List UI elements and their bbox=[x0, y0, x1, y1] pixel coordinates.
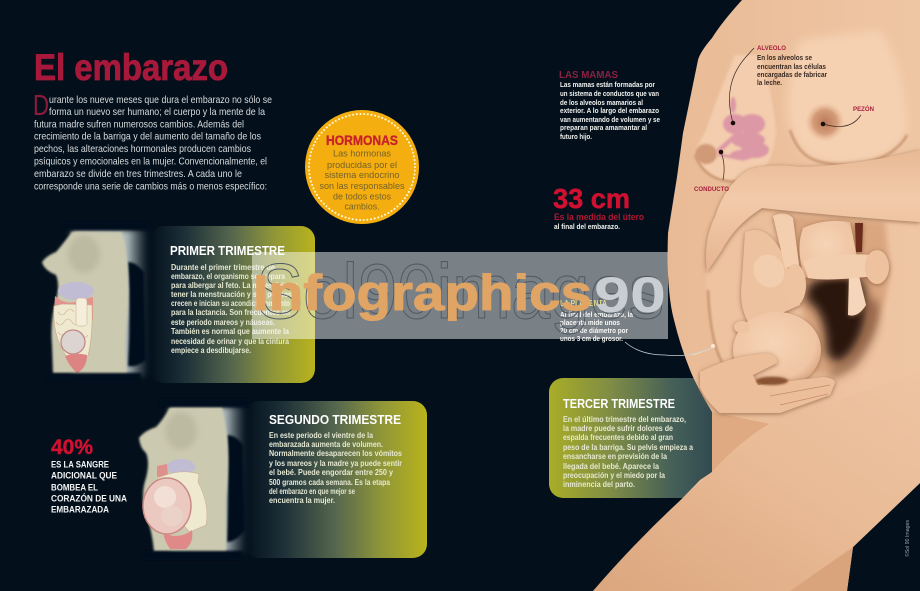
tercer trimestre text: espalda frecuentes debido al gran bbox=[563, 433, 673, 442]
segundo trimestre text bbox=[269, 431, 402, 505]
text: copyright: ©Sol 90 Images bbox=[904, 520, 911, 557]
primer trimestre text: También es normal que aumente la bbox=[171, 327, 289, 336]
primer trimestre text: para la lactancia. Son frecuentes en bbox=[171, 308, 290, 317]
tercer trimestre text: ensancharse en previsión de la bbox=[563, 452, 667, 461]
annotation: alveolo: ALVEOLO bbox=[757, 45, 786, 52]
supporting hand bbox=[700, 353, 835, 413]
intro text block: embarazo se divide en tres trimestres. A cada uno le bbox=[34, 169, 242, 180]
heading: primer trimestre: PRIMER TRIMESTRE bbox=[170, 243, 285, 258]
segundo trimestre text: encuentra la mujer. bbox=[269, 496, 335, 505]
statistic: 40%: CORAZÓN DE UNA bbox=[51, 492, 127, 504]
uterus bbox=[706, 213, 890, 388]
panel: tercer trimestre bbox=[549, 378, 724, 498]
heading: segundo trimestre: SEGUNDO TRIMESTRE bbox=[269, 412, 401, 427]
text: las mamas: un sistema de conductos que van bbox=[560, 89, 659, 98]
organs and fetus bbox=[143, 459, 207, 549]
callout: hormonas: son las responsables bbox=[320, 181, 405, 192]
primer trimestre text: crecen e inician su acondicionamiento bbox=[171, 299, 290, 308]
statistic: 40%: EMBARAZADA bbox=[51, 504, 109, 516]
callout: hormonas: de todos estos bbox=[333, 192, 391, 202]
segundo trimestre text: En este periodo el vientre de la bbox=[269, 431, 373, 440]
right breast bbox=[788, 30, 907, 165]
watermark bbox=[252, 247, 668, 339]
text: las mamas: LAS MAMAS bbox=[559, 69, 618, 81]
annotation: pezón: PEZÓN bbox=[853, 104, 874, 113]
baby hands bbox=[748, 249, 790, 293]
mammary glands bbox=[716, 97, 769, 161]
text: la placenta: LA PLACENTA bbox=[560, 299, 607, 308]
tercer trimestre text bbox=[563, 415, 693, 489]
text: las mamas: Las mamas están formadas por bbox=[560, 80, 655, 89]
callout: hormonas: Las hormonas bbox=[333, 148, 391, 160]
segundo trimestre text: y los mareos y la madre ya puede sentir bbox=[269, 459, 402, 468]
text: la placenta bbox=[560, 299, 634, 343]
panel: segundo trimestre bbox=[245, 401, 427, 558]
text: las mamas bbox=[559, 69, 660, 141]
intro text block bbox=[33, 90, 272, 192]
drop cap: D bbox=[33, 90, 49, 122]
text: la placenta: unos 3 cm de grosor. bbox=[560, 334, 623, 343]
statistic: 33 cm: Es la medida del útero bbox=[554, 212, 644, 222]
tercer trimestre text: la madre puede sufrir dolores de bbox=[563, 424, 673, 433]
title: El embarazo bbox=[34, 47, 228, 88]
baby parts bbox=[733, 213, 889, 388]
statistic: 40% bbox=[51, 436, 127, 516]
callout: hormonas bbox=[305, 110, 419, 224]
baby back bbox=[799, 221, 858, 278]
callout: hormonas: producidas por el bbox=[327, 160, 397, 171]
illustration: segundo trimestre torso bbox=[139, 399, 250, 560]
primer trimestre text: necesidad de orinar y que la cintura bbox=[171, 337, 289, 346]
tercer trimestre text: peso de la barriga. Su pelvis empieza a bbox=[563, 443, 693, 452]
watermark outline text: Sol90images bbox=[256, 247, 664, 335]
statistic: 33 cm: al final del embarazo. bbox=[554, 222, 620, 231]
baby forearm bbox=[773, 213, 799, 268]
callout: hormonas: cambios. bbox=[344, 202, 380, 212]
body bbox=[593, 0, 920, 591]
tercer trimestre text: preocupación y el miedo por la bbox=[563, 471, 665, 480]
thigh bbox=[593, 370, 920, 591]
primer trimestre text: Durante el primer trimestre de bbox=[171, 263, 275, 272]
back leg shade bbox=[712, 412, 775, 472]
intro text block: forma un nuevo ser humano; el cuerpo y la mente de la bbox=[49, 107, 265, 118]
annotation: placenta leader bbox=[625, 342, 715, 356]
baby lower leg and foot bbox=[848, 272, 866, 316]
statistic: 40%: ES LA SANGRE bbox=[51, 460, 109, 470]
primer trimestre text: este periodo mareos y náuseas. bbox=[171, 318, 275, 327]
intro text block: urante los nueve meses que dura el embarazo no sólo se bbox=[49, 95, 272, 106]
baby body bbox=[741, 230, 800, 328]
text: la placenta: placenta mide unos bbox=[560, 318, 620, 327]
illustration: primer trimestre torso bbox=[42, 222, 150, 382]
text: las mamas: van aumentando de volumen y se bbox=[560, 115, 660, 124]
segundo trimestre text: Normalmente desaparecen los vómitos bbox=[269, 449, 402, 458]
arm across chest bbox=[706, 150, 920, 272]
text: las mamas: futuro hijo. bbox=[560, 132, 592, 141]
watermark orange text: Infographics bbox=[253, 265, 592, 321]
panel: primer trimestre bbox=[150, 226, 315, 383]
annotation: pezón bbox=[821, 104, 874, 127]
statistic: 40%: ADICIONAL QUE bbox=[51, 470, 117, 482]
text: las mamas: preparan para amamantar al bbox=[560, 123, 647, 132]
intro text block: corresponde una serie de cambios más o menos específico: bbox=[34, 182, 267, 192]
intro text block: pechos, las alteraciones hormonales producen cambios bbox=[34, 144, 251, 155]
annotation: alveolo: encuentran las células bbox=[757, 62, 826, 71]
text: la placenta: 20 cm de diámetro por bbox=[560, 326, 628, 335]
organs bbox=[54, 282, 94, 373]
primer trimestre text: empiece a desdibujarse. bbox=[171, 346, 251, 355]
statistic: 40%: BOMBEA EL bbox=[51, 482, 98, 494]
annotation: alveolo bbox=[729, 45, 827, 125]
left breast bbox=[694, 55, 776, 182]
heading: tercer trimestre: TERCER TRIMESTRE bbox=[563, 396, 675, 411]
annotation: conducto: CONDUCTO bbox=[694, 186, 729, 193]
primer trimestre text bbox=[171, 263, 298, 355]
annotation: alveolo: En los alveolos se bbox=[757, 53, 812, 62]
illustration: pregnant woman bbox=[593, 0, 920, 591]
callout: hormonas: sistema endocrino bbox=[324, 170, 400, 181]
dark shadow bbox=[805, 274, 867, 362]
text: la placenta: Al final del embarazo, la bbox=[560, 310, 634, 319]
intro text block: crecimiento de la barriga y del aumento del tamaño de los bbox=[34, 132, 261, 143]
watermark white number: 90 bbox=[594, 267, 666, 323]
segundo trimestre text: embarazada aumenta de volumen. bbox=[269, 440, 383, 449]
callout: hormonas: HORMONAS bbox=[326, 133, 398, 148]
annotation: conducto bbox=[694, 150, 729, 193]
bracelet bbox=[692, 347, 713, 355]
text: las mamas: de los alveolos mamarios al bbox=[560, 98, 643, 107]
baby thigh bbox=[803, 254, 880, 279]
text: las mamas: exterior. A lo largo del embarazo bbox=[560, 106, 659, 115]
intro text block: psíquicos y emocionales en la mujer. Convencionalmente, el bbox=[34, 156, 267, 168]
tercer trimestre text: inminencia del parto. bbox=[563, 480, 635, 489]
annotation: alveolo: encargadas de fabricar bbox=[757, 70, 827, 79]
tercer trimestre text: En el último trimestre del embarazo, bbox=[563, 415, 686, 424]
tercer trimestre text: llegada del bebé. Aparece la bbox=[563, 462, 659, 471]
annotation: alveolo: la leche. bbox=[757, 78, 782, 87]
segundo trimestre text: del embarazo en que mejor se bbox=[269, 487, 355, 496]
statistic: 33 cm bbox=[553, 183, 644, 231]
statistic: 33 cm: 33 cm bbox=[553, 183, 630, 214]
segundo trimestre text: el bebé. Puede engordar entre 250 y bbox=[269, 468, 393, 477]
statistic: 40%: 40% bbox=[51, 436, 93, 459]
primer trimestre text: para albergar al feto. La mujer deja de bbox=[171, 281, 298, 290]
primer trimestre text: embarazo, el organismo se prepara bbox=[171, 272, 285, 281]
primer trimestre text: tener la menstruación y sus pechos bbox=[171, 290, 292, 299]
cord bbox=[855, 223, 863, 252]
intro text block: futura madre sufren numerosos cambios. Además del bbox=[34, 120, 244, 130]
baby head bbox=[733, 312, 821, 388]
segundo trimestre text: 500 gramos cada semana. Es la etapa bbox=[269, 478, 390, 487]
